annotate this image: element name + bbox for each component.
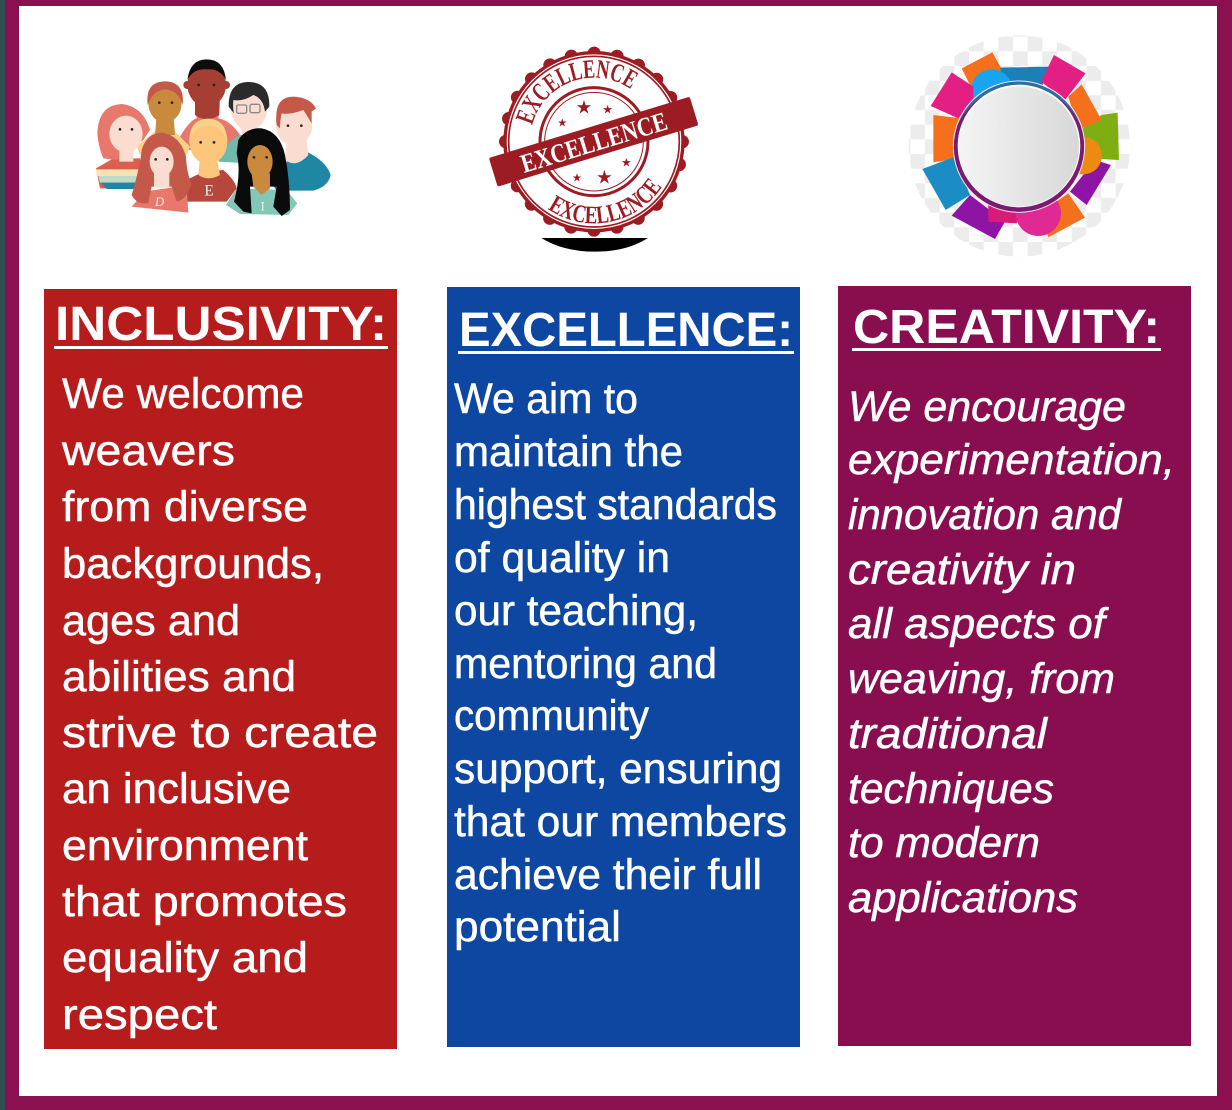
heading: excellence: EXCELLENCE:	[459, 304, 793, 357]
figure: blonde person in maroon E shirt: E	[204, 182, 214, 199]
text: excellence description: our teaching,	[454, 587, 698, 635]
text: inclusivity description: from diverse	[62, 483, 308, 531]
centre disc	[953, 80, 1085, 212]
panel: creativity	[838, 286, 1191, 1046]
text: inclusivity description: equality and	[62, 934, 308, 982]
stars	[557, 97, 632, 188]
text: excellence description: support, ensuring	[454, 745, 782, 793]
icon: creativity colour wheel	[909, 35, 1130, 257]
coloured shapes	[922, 52, 1119, 239]
text: creativity description: applications	[848, 874, 1078, 922]
figure: red-haired woman in D shirt	[132, 133, 192, 213]
text: inclusivity description: that promotes	[62, 878, 347, 926]
ring text bottom: EXCELLENCE	[548, 178, 662, 224]
text: excellence description: that our members	[454, 798, 787, 846]
text: creativity description: all aspects of	[848, 600, 1109, 648]
text: excellence description: potential	[454, 903, 621, 951]
black arc under stamp	[541, 238, 648, 252]
panel: excellence	[447, 287, 800, 1047]
text: creativity description: techniques	[848, 765, 1054, 813]
icon: diverse group of people	[96, 59, 331, 216]
stars: ★	[572, 171, 582, 185]
figure: person with glasses	[218, 82, 277, 165]
text: inclusivity description: We welcome	[62, 370, 304, 418]
text: creativity description: experimentation,	[848, 436, 1175, 484]
figure: red-haired man in blue	[270, 97, 331, 191]
text: creativity description: We encourage	[848, 383, 1126, 431]
text: excellence description: mentoring and	[454, 640, 717, 688]
text: excellence description: maintain the	[454, 428, 683, 476]
text: creativity description: to modern	[848, 819, 1040, 867]
text: excellence description: of quality in	[454, 534, 670, 582]
text: inclusivity description: ages and	[62, 597, 240, 645]
panel: inclusivity	[44, 289, 397, 1049]
figure: black-haired woman in I shirt	[226, 128, 297, 216]
stars: ★	[621, 156, 632, 170]
text: inclusivity description: respect	[62, 991, 217, 1039]
stars: ★	[596, 167, 613, 188]
stars: ★	[557, 116, 567, 130]
text: excellence description: achieve their full	[454, 851, 762, 899]
text: inclusivity description: backgrounds,	[62, 540, 324, 588]
text: inclusivity description: weavers	[61, 427, 235, 475]
scalloped seal	[503, 51, 685, 232]
text: inclusivity description: strive to create	[62, 709, 378, 757]
figure: left woman in striped top	[96, 104, 150, 189]
checker background	[909, 35, 1130, 257]
text: excellence description: highest standards	[454, 481, 777, 529]
figure: black-haired woman in I shirt: I	[261, 200, 265, 214]
text: excellence description: community	[454, 692, 649, 740]
text: inclusivity description: an inclusive	[62, 765, 291, 813]
ring text top: EXCELLENCE	[516, 60, 638, 125]
figure: tan person	[137, 81, 190, 155]
figure: blonde person in maroon E shirt	[187, 119, 237, 202]
text: creativity description: traditional	[848, 710, 1049, 758]
text: inclusivity description: environment	[62, 822, 308, 870]
icon: excellence stamp	[489, 46, 698, 252]
text: creativity description: weaving, from	[848, 655, 1115, 703]
stars: ★	[602, 102, 613, 116]
text: creativity description: innovation and	[848, 491, 1123, 539]
text: excellence description: We aim to	[454, 375, 638, 423]
text: inclusivity description	[61, 370, 378, 1039]
stars: ★	[576, 97, 592, 118]
figure: red-haired woman in D shirt: D	[154, 195, 164, 209]
text: excellence description	[454, 375, 787, 951]
text: creativity description: creativity in	[848, 546, 1076, 594]
text: creativity description	[848, 383, 1175, 922]
heading: inclusivity: INCLUSIVITY:	[55, 298, 387, 351]
heading: creativity: CREATIVITY:	[853, 301, 1160, 354]
banner: EXCELLENCE	[517, 106, 671, 179]
text: inclusivity description: abilities and	[62, 653, 296, 701]
figure: back centre man	[180, 59, 240, 150]
